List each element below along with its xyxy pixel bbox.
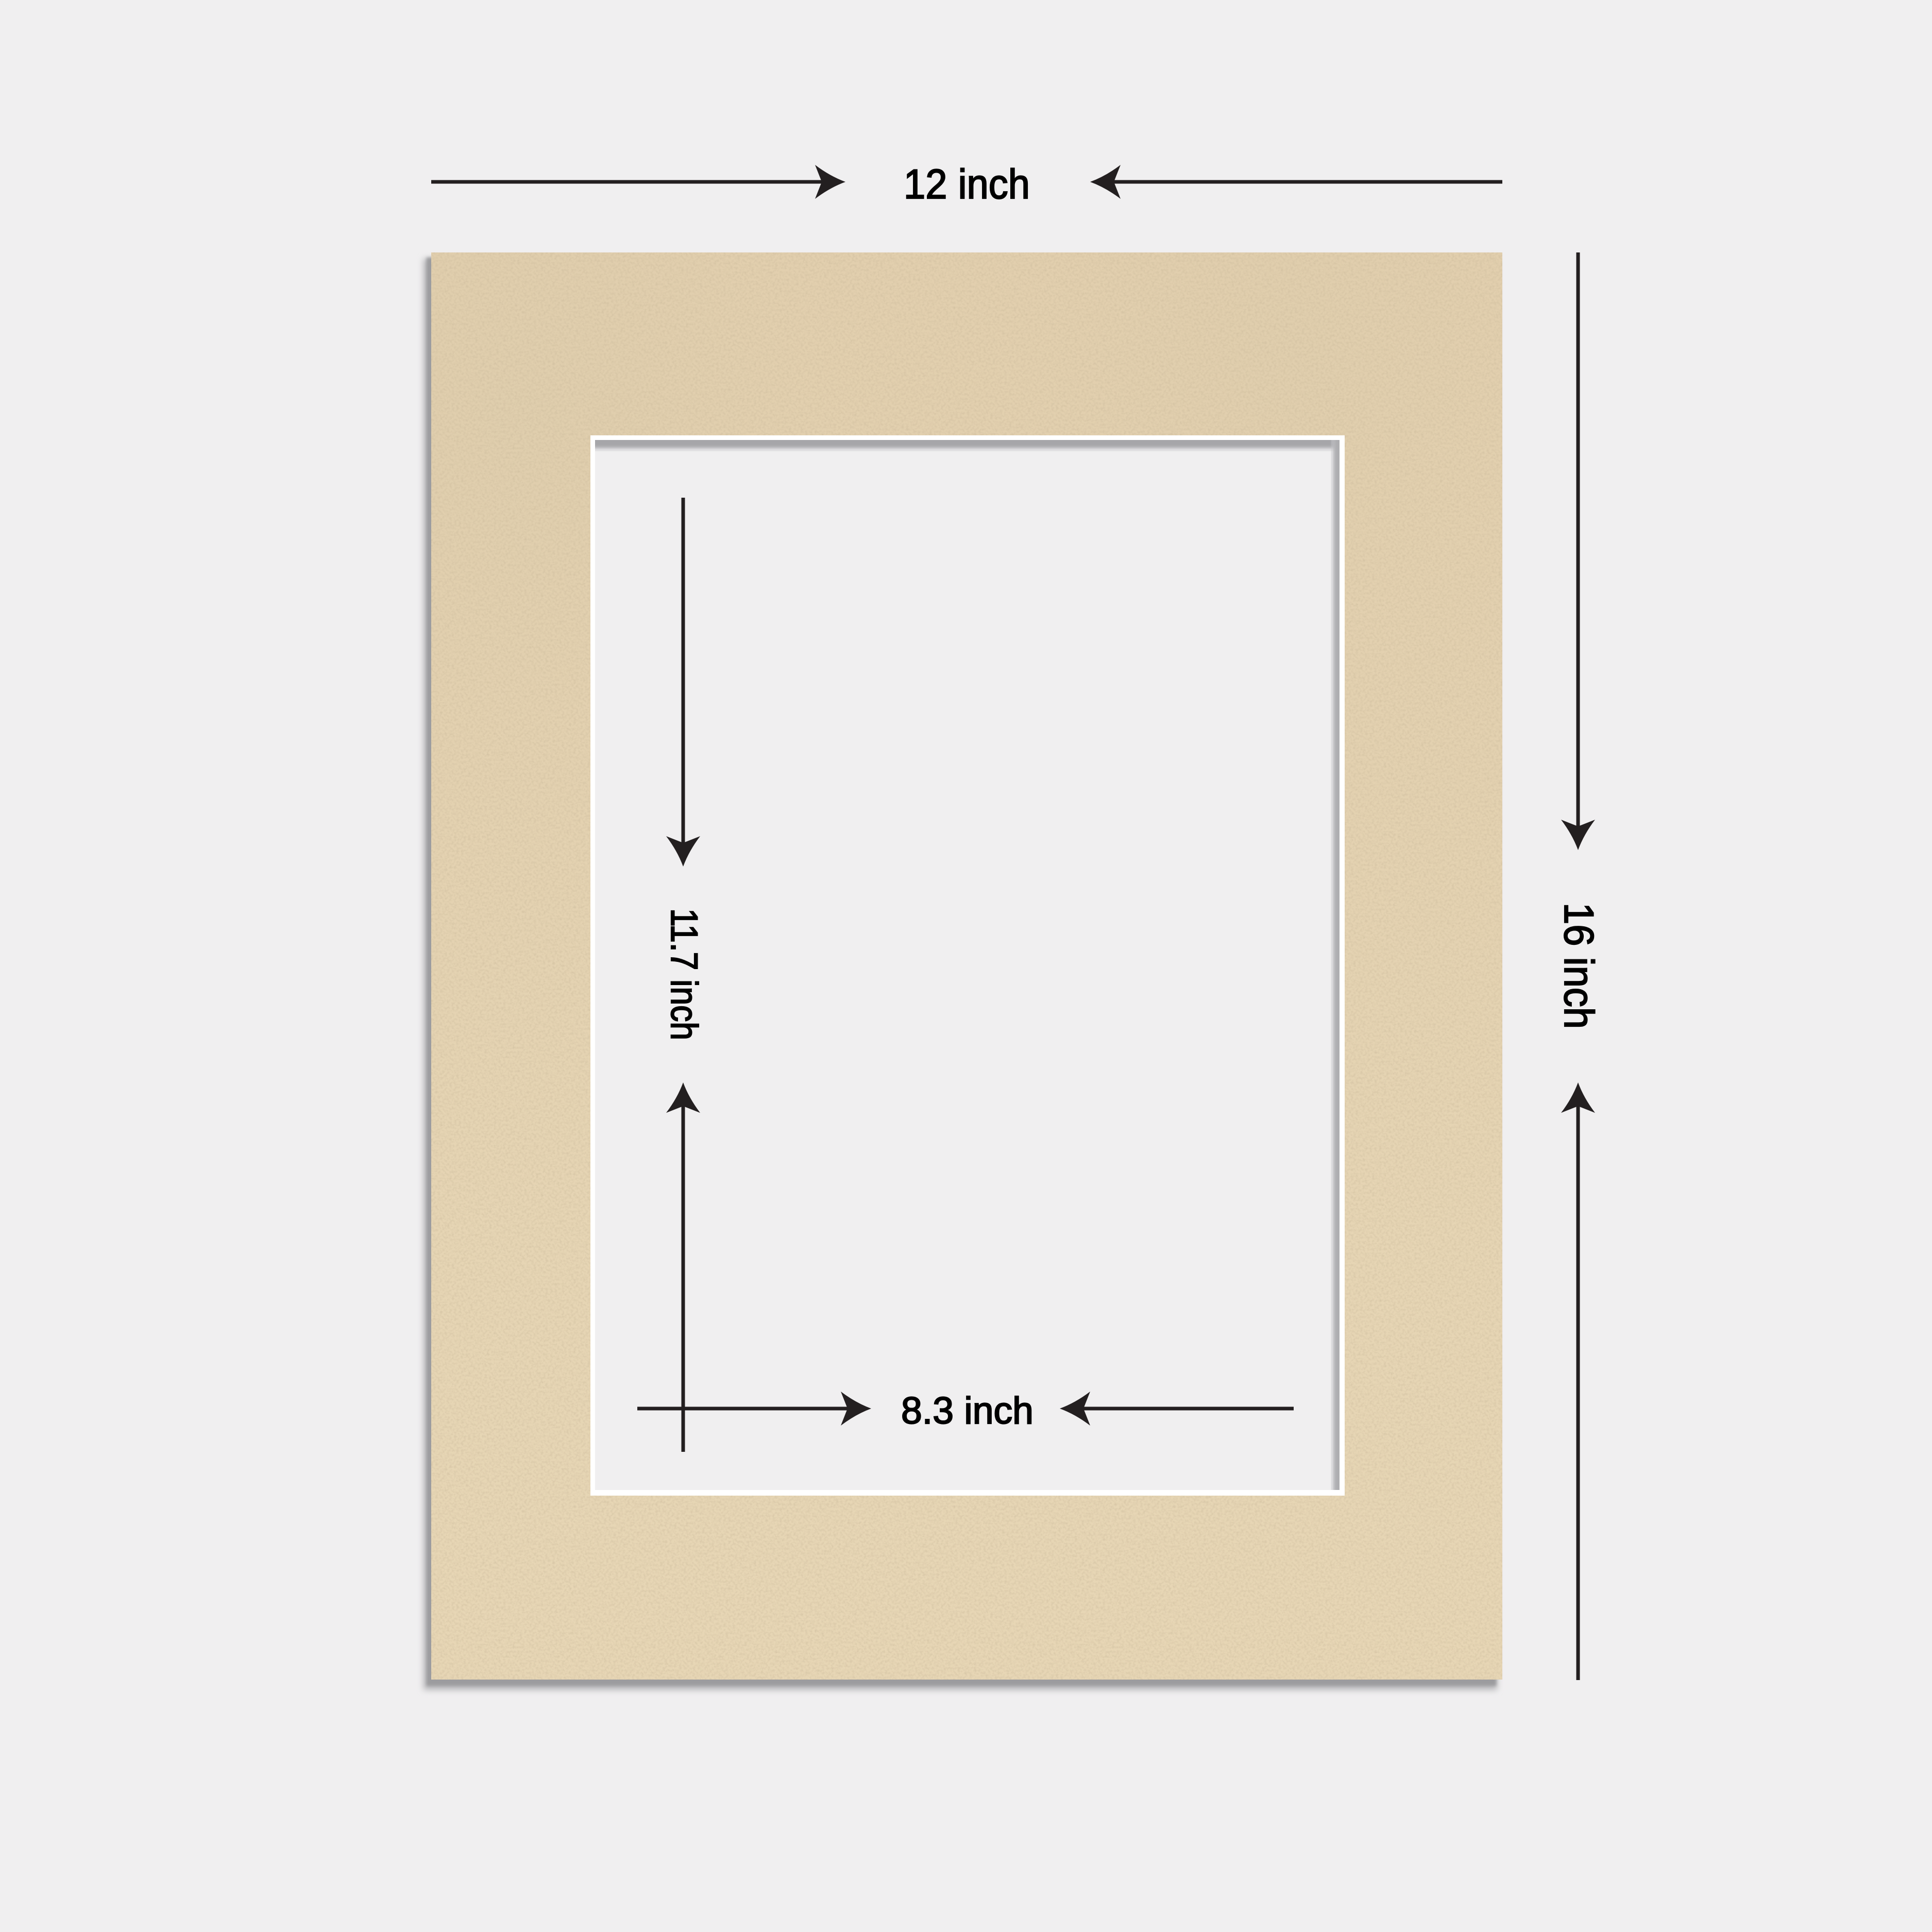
- arrow: left pointing right: [431, 165, 845, 199]
- window inner shadows: [595, 440, 1595, 1490]
- arrow: top pointing down: [666, 498, 700, 867]
- dimension: 12 inch width: [431, 161, 1502, 208]
- mat surface tone: [431, 252, 1502, 1680]
- dimension: 16 inch height: [1555, 252, 1602, 1680]
- label: 12 inch: 12 inch: [904, 161, 1030, 208]
- label: 16 inch: 16 inch: [1555, 903, 1602, 1029]
- arrow: bottom pointing up: [666, 1082, 700, 1452]
- mat board drop shadow: [423, 258, 1497, 1690]
- arrow: left pointing right: [637, 1392, 871, 1426]
- arrow: right pointing left: [1060, 1392, 1294, 1426]
- panel: mat board with window: [431, 252, 1502, 1680]
- label: 8.3 inch: 8.3 inch: [901, 1390, 1033, 1432]
- mat surface: [431, 252, 1502, 1680]
- arrow: right pointing left: [1090, 165, 1502, 199]
- window opening: [595, 440, 1340, 1490]
- arrow: bottom pointing up: [1561, 1082, 1595, 1680]
- arrow: top pointing down: [1561, 252, 1595, 850]
- dimension: 11.7 inch window height: [663, 498, 705, 1452]
- white bevel of window: [590, 435, 1345, 1496]
- dimension: 8.3 inch window width: [637, 1390, 1294, 1432]
- label: 11.7 inch: 11.7 inch: [663, 908, 705, 1040]
